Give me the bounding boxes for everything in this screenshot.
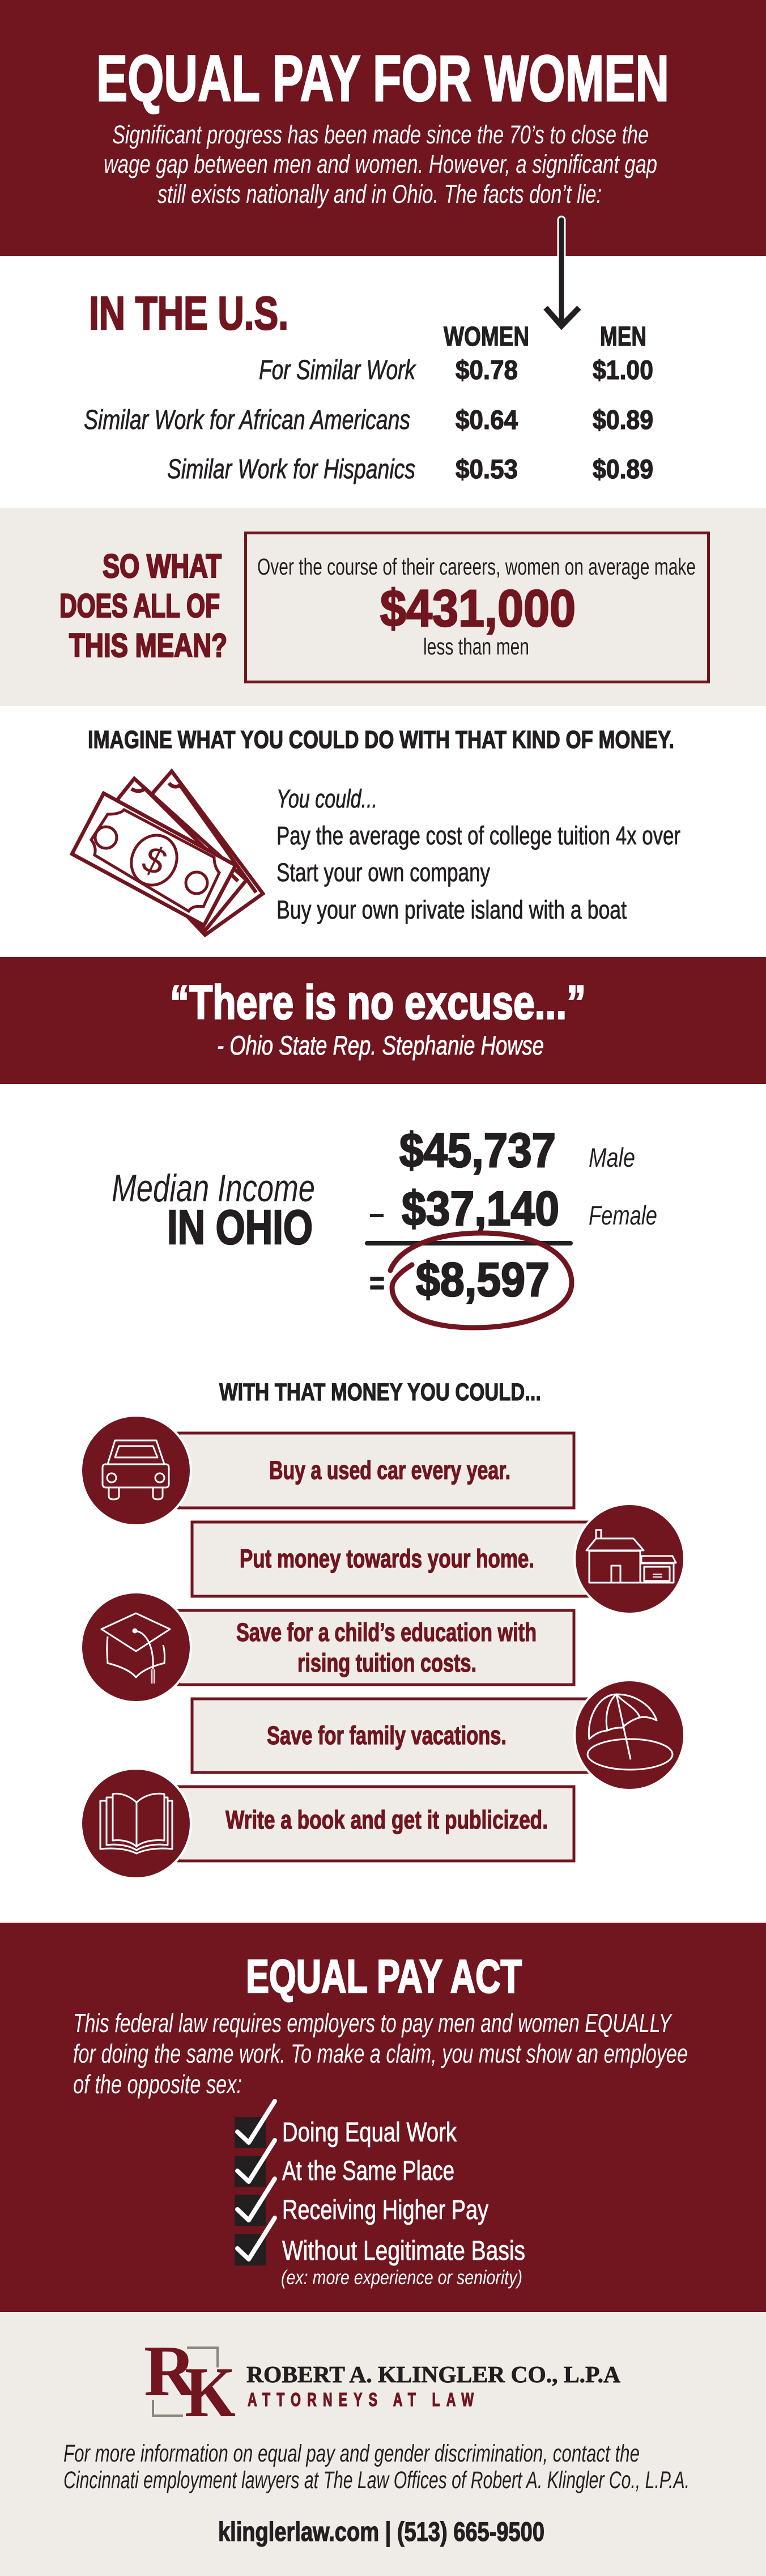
panel: quote bbox=[0, 957, 766, 1084]
male income: Male bbox=[589, 1142, 635, 1172]
logo: K bbox=[185, 2353, 236, 2432]
row: Hispanics bbox=[167, 454, 653, 484]
heading: so what: DOES ALL OF bbox=[59, 588, 220, 624]
income gap result bbox=[369, 1233, 572, 1328]
logo bbox=[144, 2331, 620, 2432]
intro text bbox=[104, 120, 657, 209]
income gap result: $8,597 bbox=[416, 1253, 550, 1306]
female income: $37,140 bbox=[402, 1182, 559, 1236]
checklist item: legitimate basis: Without Legitimate Basis bbox=[282, 2236, 525, 2266]
panel: median income in Ohio bbox=[112, 1124, 657, 1328]
row: African Americans: Similar Work for African Americans bbox=[84, 405, 410, 435]
item: home bbox=[192, 1522, 601, 1596]
checklist item: same place bbox=[235, 2140, 454, 2187]
panel: footer bbox=[0, 2312, 766, 2576]
quote attribution: - Ohio State Rep. Stephanie Howse bbox=[217, 1030, 544, 1060]
arrow bbox=[546, 220, 579, 326]
item: book bbox=[178, 1787, 574, 1861]
heading: so what: SO WHAT bbox=[103, 548, 222, 585]
icon: money bbox=[72, 771, 263, 935]
item: vacations: Save for family vacations. bbox=[267, 1721, 507, 1750]
callout box: $431,000 bbox=[380, 580, 576, 637]
row: African Americans: $0.64 bbox=[456, 405, 518, 435]
heading: in Ohio: IN OHIO bbox=[167, 1201, 313, 1255]
checklist item: higher pay bbox=[235, 2179, 488, 2226]
heading: equal pay act: EQUAL PAY ACT bbox=[246, 1950, 522, 2003]
icon: money: $ bbox=[138, 837, 171, 883]
row: similar work: For Similar Work bbox=[259, 355, 416, 385]
heading: in the U.S.: IN THE U.S. bbox=[89, 287, 288, 339]
logo: ATTORNEYS AT LAW bbox=[248, 2390, 474, 2411]
item: used car bbox=[178, 1433, 574, 1508]
icon: beach umbrella bbox=[574, 1680, 684, 1790]
contact text bbox=[63, 2440, 690, 2494]
heading: with that money: WITH THAT MONEY YOU COULD... bbox=[219, 1379, 541, 1406]
text: you could list bbox=[276, 784, 680, 924]
checklist item: legitimate basis: (ex: more experience or seniority) bbox=[281, 2267, 522, 2289]
item: education bbox=[178, 1610, 574, 1685]
item: used car: Buy a used car every year. bbox=[269, 1456, 510, 1485]
row: similar work: $1.00 bbox=[593, 355, 653, 385]
item: home: Put money towards your home. bbox=[240, 1544, 534, 1573]
checklist item: legitimate basis bbox=[235, 2218, 525, 2289]
quote: “There is no excuse...” bbox=[170, 976, 586, 1029]
panel: header bbox=[0, 0, 766, 256]
law description bbox=[73, 2008, 688, 2099]
checklist bbox=[235, 2101, 525, 2289]
panel: so what does all of this mean bbox=[0, 508, 766, 706]
website and phone: klinglerlaw.com | (513) 665-9500 bbox=[218, 2517, 544, 2547]
checklist item: same place: At the Same Place bbox=[282, 2156, 454, 2186]
row: Hispanics: Similar Work for Hispanics bbox=[167, 454, 415, 484]
row: similar work: $0.78 bbox=[456, 355, 518, 385]
row: similar work bbox=[259, 355, 653, 385]
callout box: less than men bbox=[423, 634, 529, 660]
icon: car bbox=[81, 1415, 191, 1525]
intro text: still exists nationally and in Ohio. The facts don’t lie: bbox=[158, 180, 602, 209]
logo: ROBERT A. KLINGLER CO., L.P.A bbox=[246, 2361, 620, 2387]
female income: Female bbox=[589, 1200, 657, 1230]
callout box bbox=[246, 533, 708, 682]
item: education: rising tuition costs. bbox=[297, 1648, 476, 1677]
heading: so what bbox=[59, 548, 227, 664]
logo: R bbox=[144, 2331, 197, 2411]
panel: in the U.S. bbox=[84, 287, 653, 484]
item: book: Write a book and get it publicized. bbox=[225, 1805, 548, 1834]
text: you could list: Start your own company bbox=[276, 858, 490, 887]
male income: $45,737 bbox=[399, 1124, 556, 1178]
item: education: Save for a child’s education with bbox=[236, 1618, 537, 1647]
row: Hispanics: $0.53 bbox=[456, 454, 518, 484]
text: you could list: Buy your own private island with a boat bbox=[276, 895, 627, 924]
checklist item: equal work bbox=[235, 2101, 457, 2148]
icon: house bbox=[574, 1504, 684, 1614]
item: vacations bbox=[192, 1699, 601, 1772]
law description: of the opposite sex: bbox=[73, 2069, 242, 2099]
icon: graduation cap bbox=[81, 1592, 191, 1702]
female income bbox=[370, 1182, 657, 1236]
checklist item: higher pay: Receiving Higher Pay bbox=[282, 2195, 488, 2225]
text: you could list: You could... bbox=[276, 784, 377, 813]
row: African Americans: $0.89 bbox=[593, 405, 653, 435]
row: Hispanics: $0.89 bbox=[593, 454, 653, 484]
heading: so what: THIS MEAN? bbox=[69, 627, 227, 664]
heading: median income: Median Income bbox=[112, 1167, 315, 1210]
checklist item: equal work: Doing Equal Work bbox=[282, 2118, 457, 2148]
income gap result: = bbox=[369, 1265, 385, 1300]
panel: equal pay act bbox=[0, 1923, 766, 2312]
icon: book bbox=[81, 1769, 191, 1878]
column heading: women: WOMEN bbox=[444, 322, 529, 352]
column heading: men: MEN bbox=[600, 322, 646, 352]
